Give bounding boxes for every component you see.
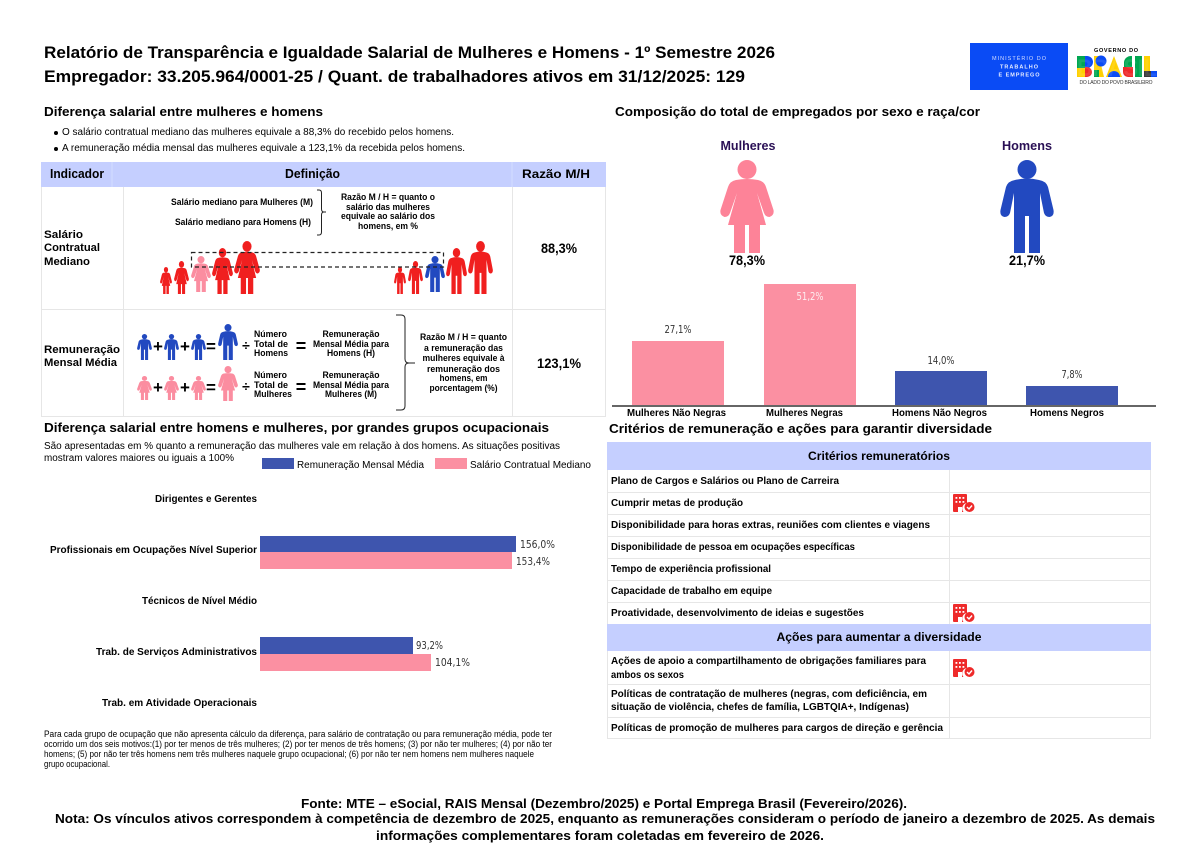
bar chart: grupos ocupacionais: 156,0% xyxy=(520,539,555,551)
bar chart: composição por raça/cor xyxy=(612,284,1156,419)
footer: fonte e nota: informações complementares foram coletadas em fevereiro de 2026. xyxy=(376,828,824,843)
text block: descrição do gráfico: São apresentadas em % quanto a remuneração das mulheres vale em relação à dos homens. As situações positivas xyxy=(44,441,560,452)
ações list: ambos os sexos xyxy=(611,670,684,681)
row: remuneração mensal média: Razão M / H = quanto xyxy=(420,332,507,342)
text block: nota sobre grupos: grupo ocupacional. xyxy=(44,759,110,769)
formula: men: = xyxy=(296,336,306,356)
logo: Governo do Brasil xyxy=(1077,48,1157,86)
table header: Razão M/H xyxy=(522,167,590,181)
critérios list: Disponibilidade de pessoa em ocupações específicas xyxy=(611,542,855,553)
formula: men: Remuneração xyxy=(322,329,380,339)
formula: women: Mulheres xyxy=(254,389,292,399)
legend: Salário Contratual Mediano xyxy=(470,460,592,471)
text block: bullet findings: A remuneração média mensal das mulheres equivale a 123,1% da recebida pelos homens. xyxy=(62,143,465,154)
logo: Governo do Brasil: GOVERNO DO xyxy=(1094,48,1139,54)
ações list: situação de violência, chefes de família, LGBTQIA+, Indígenas) xyxy=(611,702,909,713)
legend xyxy=(262,458,592,471)
logo: Governo do Brasil: BRASIL xyxy=(1077,55,1157,82)
text block: descrição do gráfico xyxy=(44,441,560,464)
formula: women: Número xyxy=(254,370,287,380)
row: remuneração mensal média: remuneração dos xyxy=(427,364,500,374)
formula: men: Homens xyxy=(254,348,288,358)
logo: Ministério do Trabalho e Emprego: MINISTÉRIO DO xyxy=(992,55,1047,62)
row: remuneração mensal média xyxy=(44,315,581,410)
critérios list: Plano de Cargos e Salários ou Plano de Carreira xyxy=(611,476,839,487)
bar chart: grupos ocupacionais: 93,2% xyxy=(416,640,443,652)
formula: women: = xyxy=(296,377,306,397)
bar chart: grupos ocupacionais: 104,1% xyxy=(435,657,470,669)
formula: women: Mulheres (M) xyxy=(325,389,377,399)
formula: men: Número xyxy=(254,329,287,339)
text block: bullet findings xyxy=(54,127,465,154)
formula: men xyxy=(137,324,390,360)
row: remuneração mensal média: Mensal Média xyxy=(44,357,118,369)
row: salário contratual mediano xyxy=(44,190,577,294)
text block: nota sobre grupos xyxy=(44,729,552,769)
row: salário contratual mediano: Contratual xyxy=(44,242,100,254)
icon: mulheres 78,3% xyxy=(720,138,776,268)
bar chart: composição por raça/cor: Homens Não Negros xyxy=(892,408,987,419)
bar chart: grupos ocupacionais: 153,4% xyxy=(516,556,550,568)
row: salário contratual mediano: Salário mediano para Homens (H) xyxy=(175,217,311,227)
icon: homens 21,7% xyxy=(1000,138,1054,268)
formula: women: Total de xyxy=(254,380,288,390)
logo: Ministério do Trabalho e Emprego xyxy=(970,43,1068,90)
text block: bullet findings: O salário contratual mediano das mulheres equivale a 88,3% do recebido pelos homens. xyxy=(62,127,454,138)
critérios list: Capacidade de trabalho em equipe xyxy=(611,586,772,597)
title: Empregador: 33.205.964/0001-25 / Quant. de trabalhadores ativos em 31/12/2025: 129 xyxy=(44,67,745,86)
icon: empresa adota critério xyxy=(953,494,974,512)
heading: composição: Composição do total de empregados por sexo e raça/cor xyxy=(615,104,980,119)
logo: Ministério do Trabalho e Emprego: E EMPREGO xyxy=(998,72,1040,78)
critérios list: Tempo de experiência profissional xyxy=(611,564,771,575)
header: ações: Ações para aumentar a diversidade xyxy=(776,630,982,644)
row: remuneração mensal média: a remuneração das xyxy=(424,343,503,353)
bar chart: grupos ocupacionais xyxy=(50,494,555,709)
critérios list xyxy=(611,476,930,619)
bar chart: composição por raça/cor: 7,8% xyxy=(1062,369,1083,381)
row: salário contratual mediano: 88,3% xyxy=(541,241,577,256)
bar chart: composição por raça/cor: 51,2% xyxy=(796,291,824,303)
ações list: Políticas de promoção de mulheres para cargos de direção e gerência xyxy=(611,723,943,734)
heading: grupos ocupacionais: Diferença salarial entre homens e mulheres, por grandes grupos ocupacionais xyxy=(44,420,549,435)
formula: women: Remuneração xyxy=(322,370,380,380)
header: ações xyxy=(607,624,1151,651)
text block: nota sobre grupos: ocorrido um dos seis motivos:(1) por ter menos de três mulheres; (2) por ter menos de três homens; (3) por não ter mulheres; (4) por não ter xyxy=(44,739,552,749)
icon: mulheres 78,3%: 78,3% xyxy=(729,253,765,268)
row: salário contratual mediano: Mediano xyxy=(44,256,90,268)
formula: women: + xyxy=(153,378,163,397)
formula: women xyxy=(137,366,390,401)
bar chart: grupos ocupacionais: Trab. de Serviços Administrativos xyxy=(96,647,257,658)
text block: nota sobre grupos: Para cada grupo de ocupação que não apresenta cálculo da diferença, para salário de contratação ou para remuneração média, pode ter xyxy=(44,729,552,739)
icon: empresa adota proatividade xyxy=(953,604,974,622)
formula: men: Mensal Média para xyxy=(313,339,390,349)
icon: empresa adota ação xyxy=(953,659,974,677)
formula: men: Homens (H) xyxy=(327,348,375,358)
table header xyxy=(41,162,606,187)
critérios list: Cumprir metas de produção xyxy=(611,498,743,509)
row: salário contratual mediano: homens, em % xyxy=(358,221,418,231)
row: salário contratual mediano: salário das mulheres xyxy=(346,202,430,212)
panel: indicator table xyxy=(41,162,606,416)
row: remuneração mensal média: porcentagem (%) xyxy=(430,383,498,393)
figures: women by wage xyxy=(160,241,260,294)
formula: women: Mensal Média para xyxy=(313,380,390,390)
critérios list: Proatividade, desenvolvimento de ideias e sugestões xyxy=(611,608,864,619)
title: Relatório de Transparência e Igualdade Salarial de Mulheres e Homens - 1º Semestre 2026 xyxy=(44,43,775,62)
header: critérios remuneratórios: Critérios remuneratórios xyxy=(808,449,950,463)
formula: men: = xyxy=(206,337,216,356)
heading: critérios: Critérios de remuneração e ações para garantir diversidade xyxy=(609,421,992,436)
title xyxy=(44,43,775,86)
icon: homens 21,7%: 21,7% xyxy=(1009,253,1045,268)
bar chart: composição por raça/cor: Homens Negros xyxy=(1030,408,1104,419)
formula: women: ÷ xyxy=(242,378,250,394)
bar chart: grupos ocupacionais: Dirigentes e Gerentes xyxy=(155,494,257,505)
bar chart: grupos ocupacionais: Técnicos de Nível Médio xyxy=(142,596,257,607)
ações list xyxy=(611,656,943,734)
critérios list: Disponibilidade para horas extras, reuniões com clientes e viagens xyxy=(611,520,930,531)
formula: men: Total de xyxy=(254,339,288,349)
logo: Ministério do Trabalho e Emprego: TRABALHO xyxy=(1000,64,1039,70)
icon: mulheres 78,3%: Mulheres xyxy=(720,138,776,153)
panel: critérios table xyxy=(607,442,1151,738)
footer: fonte e nota: Nota: Os vínculos ativos correspondem à competência de dezembro de 2025, enquanto as remunerações consideram o período de janeiro a dezembro de 2025. As demais xyxy=(55,811,1155,826)
header: critérios remuneratórios xyxy=(607,442,1151,470)
ações list: Ações de apoio a compartilhamento de obrigações familiares para xyxy=(611,656,926,667)
bar chart: composição por raça/cor: 14,0% xyxy=(928,355,955,367)
formula: men: ÷ xyxy=(242,337,250,353)
bar chart: composição por raça/cor: Mulheres Negras xyxy=(766,408,843,419)
logo: Governo do Brasil: DO LADO DO POVO BRASILEIRO xyxy=(1080,80,1153,86)
bar chart: composição por raça/cor: 27,1% xyxy=(664,324,692,336)
row: remuneração mensal média: Remuneração xyxy=(44,344,120,356)
formula: women: + xyxy=(180,378,190,397)
formula: men: + xyxy=(180,337,190,356)
text block: descrição do gráfico: mostram valores maiores ou iguais a 100% xyxy=(44,453,234,464)
footer: fonte e nota: Fonte: MTE – eSocial, RAIS Mensal (Dezembro/2025) e Portal Emprega Brasil (Fevereiro/2026). xyxy=(301,796,907,811)
figures: men by wage xyxy=(394,241,493,294)
bar chart: grupos ocupacionais: Trab. em Atividade Operacionais xyxy=(102,698,257,709)
bar chart: grupos ocupacionais: Profissionais em Ocupações Nível Superior xyxy=(50,545,257,556)
row: salário contratual mediano: equivale ao salário dos xyxy=(341,211,435,221)
formula: women: = xyxy=(206,378,216,397)
row: salário contratual mediano: Salário mediano para Mulheres (M) xyxy=(171,197,313,207)
row: salário contratual mediano: Razão M / H = quanto o xyxy=(341,192,435,202)
row: remuneração mensal média: homens, em xyxy=(440,373,488,383)
row: remuneração mensal média: 123,1% xyxy=(537,356,581,371)
footer: fonte e nota xyxy=(55,796,1155,843)
bar chart: composição por raça/cor: Mulheres Não Negras xyxy=(627,408,726,419)
row: remuneração mensal média: mulheres equivale à xyxy=(422,353,505,363)
heading: diferença salarial: Diferença salarial entre mulheres e homens xyxy=(44,104,323,119)
text block: nota sobre grupos: homens; (5) por não ter três homens nem três mulheres naquele grupo ocupacional; (6) por não ter nem homens nem mulheres naquele xyxy=(44,749,534,759)
table header: Definição xyxy=(285,167,340,181)
table header: Indicador xyxy=(50,167,104,181)
row: salário contratual mediano: Salário xyxy=(44,229,83,241)
formula: men: + xyxy=(153,337,163,356)
icon: homens 21,7%: Homens xyxy=(1002,138,1052,153)
ações list: Políticas de contratação de mulheres (negras, com deficiência, em xyxy=(611,689,927,700)
legend: Remuneração Mensal Média xyxy=(297,460,425,471)
